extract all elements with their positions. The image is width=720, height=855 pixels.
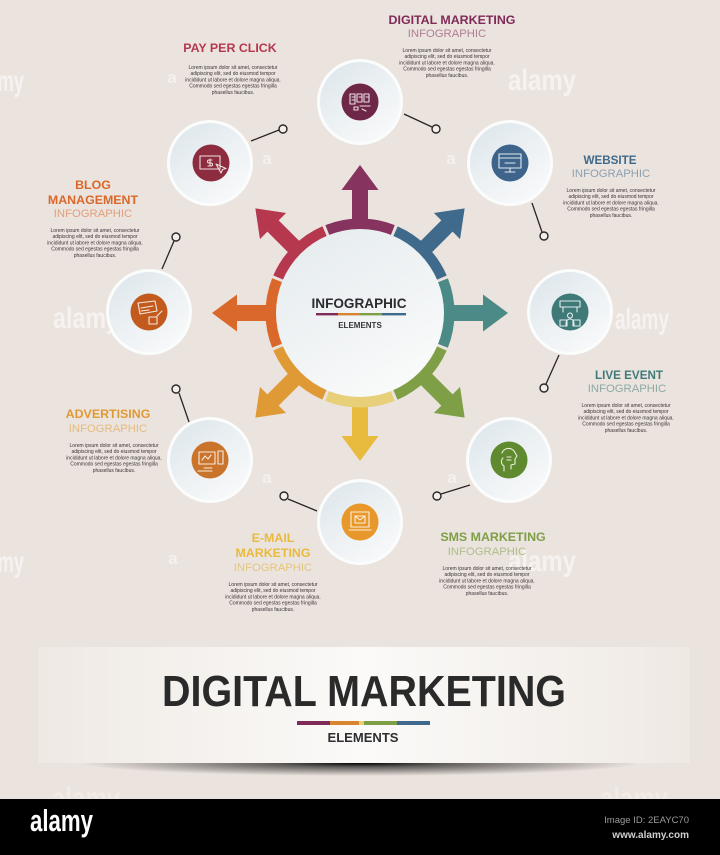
website: www.alamy.com [611, 830, 689, 841]
body text: incididunt ut labore et dolore magna aliqua. [578, 415, 674, 421]
heading: PAY PER CLICK [183, 41, 277, 55]
panel shadow [80, 763, 640, 789]
icon: pay per click [192, 144, 230, 182]
body text: Commodo sed egestas egestas fringilla [189, 84, 277, 90]
connector [433, 485, 470, 500]
connector [251, 125, 287, 141]
body text: incididunt ut labore et dolore magna aliqua. [225, 594, 321, 600]
body text: adipiscing elit, sed do eiusmod tempor [230, 588, 316, 594]
disc [168, 418, 252, 502]
body text: incididunt ut labore et dolore magna aliqua. [47, 240, 143, 246]
body text: phasellus faucibus. [74, 253, 116, 259]
body text: adipiscing elit, sed do eiusmod tempor [190, 71, 276, 77]
heading: DIGITAL MARKETING [389, 13, 515, 27]
body text: Lorem ipsum dolor sit amet, consectetur [582, 403, 671, 409]
body text: phasellus faucibus. [605, 428, 647, 434]
arrow: left [212, 294, 272, 332]
body text: incididunt ut labore et dolore magna aliqua. [185, 77, 281, 83]
body text: incididunt ut labore et dolore magna aliqua. [66, 455, 162, 461]
node: e-mail marketing [225, 480, 402, 613]
disc [108, 270, 190, 354]
watermarks: alamy [615, 303, 669, 336]
node: website [468, 122, 659, 240]
body text: adipiscing elit, sed do eiusmod tempor [52, 234, 138, 240]
subheading: INFOGRAPHIC [234, 562, 312, 574]
icon: blog [130, 294, 168, 330]
body text: Lorem ipsum dolor sit amet, consectetur [443, 566, 532, 572]
connector [162, 233, 180, 269]
watermarks: a [168, 549, 178, 568]
watermarks: a [446, 149, 456, 168]
footer logo: alamy [30, 803, 94, 838]
icon: e-mail [342, 504, 378, 540]
hub title: INFOGRAPHIC [312, 295, 406, 311]
icon: website [492, 144, 528, 182]
title panel [38, 647, 690, 789]
disc [468, 418, 550, 502]
body text: Lorem ipsum dolor sit amet, consectetur [229, 582, 318, 588]
disc [168, 122, 252, 204]
connector [280, 492, 317, 511]
body text: Commodo sed egestas egestas fringilla [567, 207, 655, 213]
heading: BLOG [75, 178, 111, 192]
disc [318, 60, 402, 144]
body text: Lorem ipsum dolor sit amet, consectetur [51, 228, 140, 234]
disc [528, 270, 612, 354]
body text: Commodo sed egestas egestas fringilla [70, 462, 158, 468]
body text: phasellus faucibus. [212, 90, 254, 96]
disc [468, 122, 552, 204]
subheading: INFOGRAPHIC [448, 546, 526, 558]
watermarks: a [262, 149, 272, 168]
body text: Lorem ipsum dolor sit amet, consectetur [567, 188, 656, 194]
subheading: INFOGRAPHIC [588, 383, 666, 395]
body text: Commodo sed egestas egestas fringilla [582, 422, 670, 428]
panel background [38, 647, 690, 763]
watermarks: alamy [508, 545, 576, 578]
hub circle [276, 229, 444, 397]
body text: Lorem ipsum dolor sit amet, consectetur [403, 48, 492, 54]
watermarks: alamy [52, 782, 120, 815]
body text: adipiscing elit, sed do eiusmod tempor [583, 409, 669, 415]
subheading: INFOGRAPHIC [69, 423, 147, 435]
body text: adipiscing elit, sed do eiusmod tempor [404, 54, 490, 60]
watermarks: a [447, 468, 457, 487]
node: sms marketing [433, 418, 550, 597]
body text: adipiscing elit, sed do eiusmod tempor [71, 449, 157, 455]
heading: LIVE EVENT [595, 368, 663, 382]
body text: phasellus faucibus. [426, 73, 468, 79]
main title: DIGITAL MARKETING [162, 667, 566, 716]
disc [318, 480, 402, 564]
heading: SMS MARKETING [440, 530, 546, 544]
body text: phasellus faucibus. [590, 213, 632, 219]
connector [540, 355, 559, 392]
subheading: INFOGRAPHIC [54, 208, 132, 220]
heading: WEBSITE [584, 153, 636, 167]
body text: adipiscing elit, sed do eiusmod tempor [444, 572, 530, 578]
watermarks: a [262, 468, 272, 487]
body text: incididunt ut labore et dolore magna aliqua. [399, 60, 495, 66]
body text: Commodo sed egestas egestas fringilla [443, 585, 531, 591]
icon: digital marketing [342, 84, 378, 120]
arrow: top [342, 165, 378, 225]
body text: Commodo sed egestas egestas fringilla [51, 247, 139, 253]
arrow: top right [409, 195, 478, 264]
body text: Commodo sed egestas egestas fringilla [403, 67, 491, 73]
watermarks: a [167, 68, 177, 87]
hub divider [316, 313, 406, 315]
subheading: INFOGRAPHIC [572, 168, 650, 180]
arrow: bottom [342, 401, 378, 461]
heading: MARKETING [235, 546, 311, 560]
body text: adipiscing elit, sed do eiusmod tempor [568, 194, 654, 200]
image id: Image ID: 2EAYC70 [604, 815, 689, 826]
node: advertising [66, 385, 252, 502]
body text: Lorem ipsum dolor sit amet, consectetur [70, 443, 159, 449]
footer bar [0, 799, 720, 855]
arrow: bottom left [242, 362, 311, 431]
body text: phasellus faucibus. [252, 607, 294, 613]
subtitle: ELEMENTS [328, 730, 399, 745]
hub subtitle: ELEMENTS [338, 321, 382, 330]
icon: live event [552, 294, 588, 330]
node: live event [528, 270, 674, 434]
watermarks: alamy [600, 782, 668, 815]
body text: Commodo sed egestas egestas fringilla [229, 601, 317, 607]
body text: incididunt ut labore et dolore magna aliqua. [439, 578, 535, 584]
connector [172, 385, 189, 422]
icon: advertising [192, 442, 228, 478]
connector [404, 114, 440, 133]
arrow: top left [242, 195, 311, 264]
ring segments [243, 196, 477, 430]
node: digital marketing [318, 13, 515, 144]
node: pay per click [168, 41, 287, 204]
watermarks: alamy [53, 302, 119, 335]
body text: phasellus faucibus. [466, 591, 508, 597]
central hub with arrows [212, 165, 508, 461]
node: blog management [47, 178, 190, 354]
body text: Lorem ipsum dolor sit amet, consectetur [189, 65, 278, 71]
arrow: right [448, 294, 508, 332]
body text: incididunt ut labore et dolore magna aliqua. [563, 200, 659, 206]
arrow: bottom right [409, 362, 478, 431]
heading: E-MAIL [252, 531, 295, 545]
subheading: INFOGRAPHIC [408, 28, 486, 40]
connector [532, 203, 548, 240]
watermarks: alamy [508, 64, 576, 97]
heading: ADVERTISING [66, 407, 150, 421]
body text: phasellus faucibus. [93, 468, 135, 474]
icon: sms marketing [490, 442, 528, 478]
title divider [297, 721, 430, 725]
heading: MANAGEMENT [48, 193, 139, 207]
